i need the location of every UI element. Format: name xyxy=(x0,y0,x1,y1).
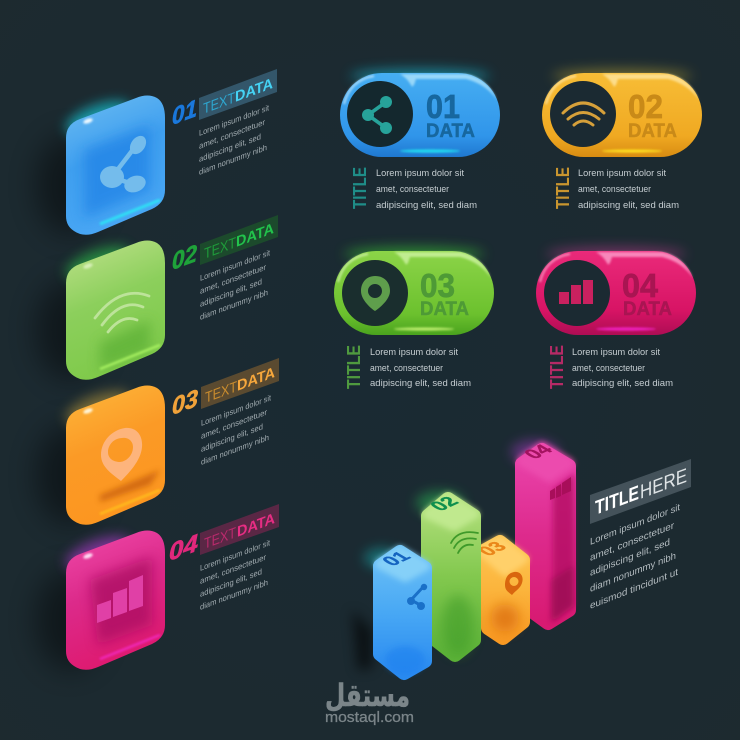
icon: share on bar xyxy=(407,584,427,610)
panel: pill 03: 03 xyxy=(420,267,455,304)
text block: title here: euismod tincidunt ut xyxy=(590,567,678,612)
panel: card 03 xyxy=(36,384,165,525)
text block: item 01 xyxy=(172,69,277,177)
text block: item 04: 04 xyxy=(169,530,198,567)
text block: item 03: amet, consectetuer xyxy=(201,407,267,441)
text block: item 02: diam nonummy nibh xyxy=(200,287,268,322)
text block: title here: adipiscing elit, sed xyxy=(590,537,670,579)
icon: wifi in circle xyxy=(550,81,616,147)
panel: pill 04: 04 xyxy=(622,267,659,304)
text block: pill 01 caption: amet, consectetuer xyxy=(376,184,449,194)
text block: item 02: 02 xyxy=(172,240,197,276)
text block: item 04: diam nonummy nibh xyxy=(200,577,268,612)
text block: pill 02 caption xyxy=(553,167,679,210)
icon: pin on bar xyxy=(505,572,523,595)
watermark: mostaql.com xyxy=(325,709,414,726)
text block: item 02: Lorem ipsum dolor sit xyxy=(200,247,271,283)
panel: pill 02 xyxy=(542,69,702,157)
text block: item 03: Lorem ipsum dolor sit xyxy=(201,392,272,428)
text block: item 03: adipiscing elit, sed xyxy=(201,421,263,454)
panel: card 01 xyxy=(36,94,165,235)
text block: item 01: amet, consectetuer xyxy=(199,117,265,151)
text block: item 03: TEXT xyxy=(205,378,237,407)
text block: pill 04 caption: TITLE xyxy=(547,345,567,389)
panel: pill 02: DATA xyxy=(628,121,677,142)
text block: title here: HERE xyxy=(640,464,687,504)
icon: wifi xyxy=(95,293,149,332)
text block: item 03: 03 xyxy=(172,385,198,421)
text block: pill 03 caption: Lorem ipsum dolor sit xyxy=(370,347,458,357)
text block: item 03: DATA xyxy=(237,364,275,395)
text block: pill 02 caption: Lorem ipsum dolor sit xyxy=(578,168,666,178)
text block: pill 01 caption: Lorem ipsum dolor sit xyxy=(376,168,464,178)
panel: pill 01: 01 xyxy=(426,88,460,125)
watermark xyxy=(325,678,414,726)
panel: card 04 xyxy=(36,529,165,670)
text block: item 01: TEXT xyxy=(203,89,235,118)
bar 01: 01 xyxy=(377,549,416,569)
text block: item 01: DATA xyxy=(235,75,273,106)
text block: item 04: amet, consectetuer xyxy=(200,552,266,586)
text block: item 04: Lorem ipsum dolor sit xyxy=(200,537,271,573)
text block: title here: TITLE xyxy=(595,481,639,520)
bar 04 xyxy=(511,440,574,623)
text block: pill 03 caption: TITLE xyxy=(344,345,364,389)
text block: item 02 xyxy=(172,215,278,322)
icon: bars on bar xyxy=(550,477,571,500)
text block: pill 03 caption xyxy=(344,345,471,389)
text block: pill 01 caption xyxy=(350,167,477,210)
panel: pill 03: DATA xyxy=(420,299,469,320)
text block: pill 04 caption xyxy=(547,345,673,389)
text block: item 02: DATA xyxy=(236,220,274,251)
text block: pill 02 caption: TITLE xyxy=(553,167,573,209)
text block: pill 03 caption: adipiscing elit, sed diam xyxy=(370,378,471,388)
panel: pill 04 xyxy=(536,247,696,335)
bar 02 xyxy=(416,491,478,655)
text block: item 01: adipiscing elit, sed xyxy=(199,131,261,164)
text block: item 03 xyxy=(172,358,279,467)
bar 04: 04 xyxy=(519,442,558,462)
text block: item 03: diam nonummy nibh xyxy=(201,432,269,467)
panel: pill 01: DATA xyxy=(426,121,475,142)
text block: pill 04 caption: Lorem ipsum dolor sit xyxy=(572,347,660,357)
text block: title here: Lorem ipsum dolor sit xyxy=(590,502,680,548)
text block: item 04: adipiscing elit, sed xyxy=(200,566,262,599)
text block: item 04: DATA xyxy=(237,510,275,541)
icon: share in circle xyxy=(347,81,413,147)
text block: pill 02 caption: amet, consectetuer xyxy=(578,184,651,194)
text block: pill 02 caption: adipiscing elit, sed diam xyxy=(578,200,679,210)
icon: wifi on bar xyxy=(451,532,478,553)
icon: map pin xyxy=(101,428,142,481)
text block: item 02: adipiscing elit, sed xyxy=(200,276,262,309)
text block: title here xyxy=(590,459,691,612)
text block: pill 03 caption: amet, consectetuer xyxy=(370,363,443,373)
panel: card 02 xyxy=(36,239,165,380)
watermark: مستقل xyxy=(325,678,410,714)
text block: item 02: TEXT xyxy=(204,234,236,263)
text block: item 02: amet, consectetuer xyxy=(200,262,266,296)
bar 02: 02 xyxy=(425,494,464,514)
panel: pill 01 xyxy=(340,69,500,157)
text block: pill 01 caption: TITLE xyxy=(350,167,370,209)
icon: pin in circle xyxy=(342,260,408,326)
text block: pill 04 caption: amet, consectetuer xyxy=(572,363,645,373)
bar 03: 03 xyxy=(473,539,512,559)
text block: item 04 xyxy=(169,504,279,612)
bar 01 xyxy=(364,548,427,674)
panel: pill 02: 02 xyxy=(628,88,663,125)
text block: item 01: 01 xyxy=(172,95,197,131)
text block: item 01: diam nonummy nibh xyxy=(199,142,267,177)
bar chart xyxy=(352,440,574,674)
bar 03 xyxy=(473,539,523,638)
icon: bars in circle xyxy=(544,260,610,326)
icon: share xyxy=(100,133,149,195)
text block: item 01: Lorem ipsum dolor sit xyxy=(199,102,270,138)
text block: item 04: TEXT xyxy=(204,524,236,553)
panel: pill 03 xyxy=(334,247,494,335)
icon: bar chart xyxy=(97,575,143,623)
panel: pill 04: DATA xyxy=(623,299,672,320)
text block: pill 01 caption: adipiscing elit, sed diam xyxy=(376,200,477,210)
text block: pill 04 caption: adipiscing elit, sed diam xyxy=(572,378,673,388)
text block: title here: amet, consectetuer xyxy=(590,520,675,564)
text block: title here: diam nonummy nibh xyxy=(590,551,676,595)
